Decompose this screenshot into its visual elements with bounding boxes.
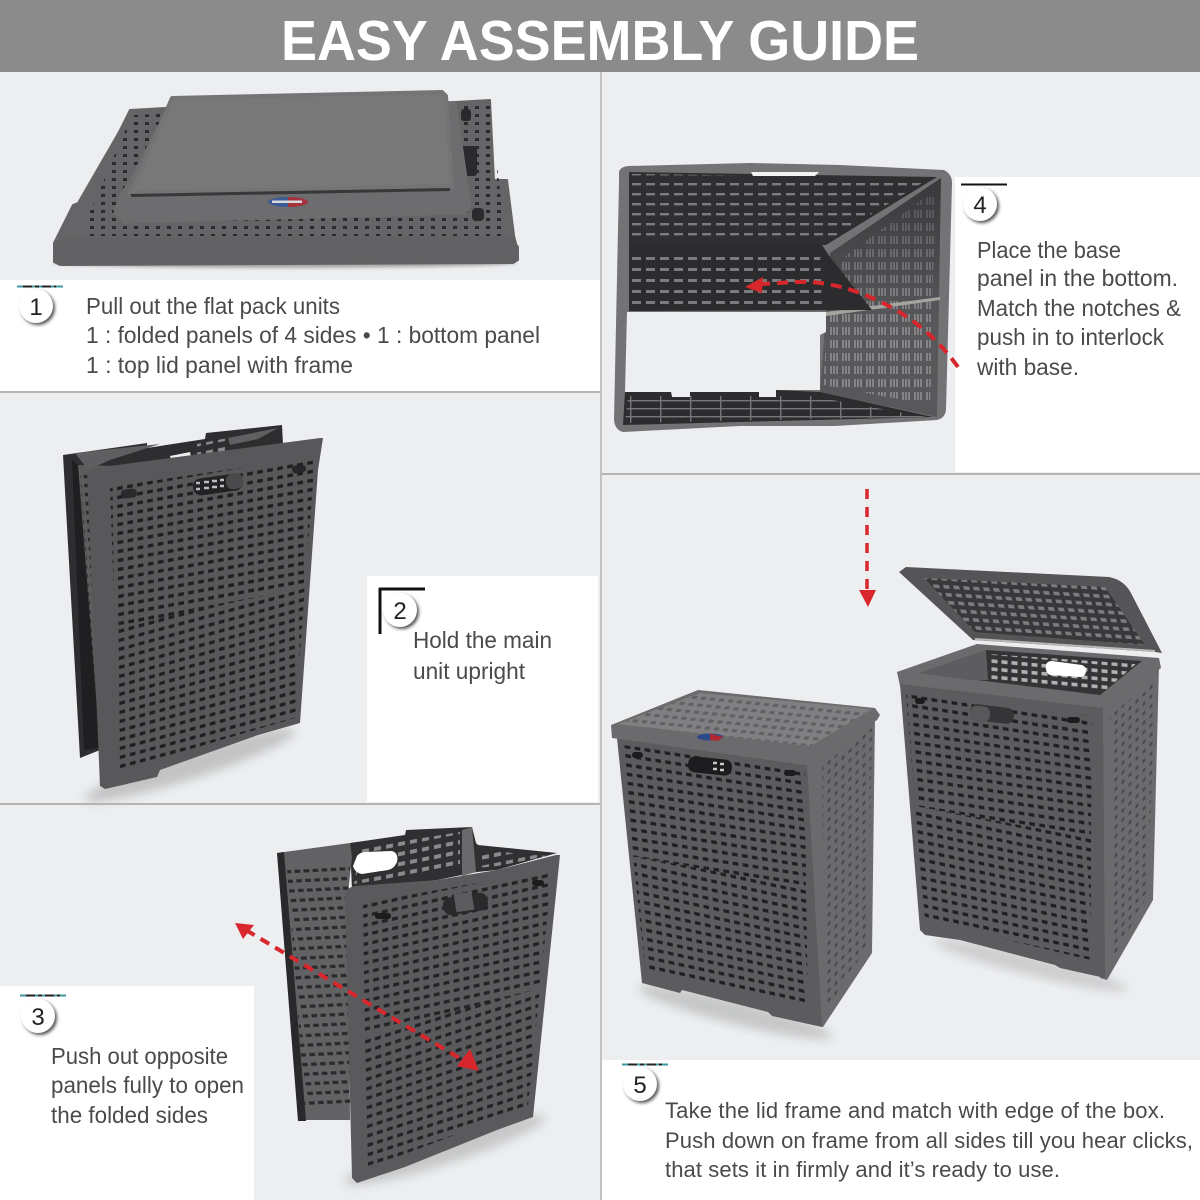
step number 4: 4 — [973, 192, 987, 219]
step number 2: 2 — [393, 598, 407, 625]
basket with open lid — [897, 567, 1162, 980]
text block: step 3 instructions: panels fully to open — [51, 1072, 244, 1098]
text block: step 2 instructions: unit upright — [413, 658, 526, 684]
text block: step 4 instructions: panel in the bottom. — [977, 265, 1178, 291]
title: EASY ASSEMBLY GUIDE — [281, 9, 919, 73]
arrow: base panel into box — [745, 277, 958, 367]
step number 5: 5 — [633, 1072, 647, 1099]
panel: step 4 — [600, 163, 1200, 475]
panel: step 2 — [0, 425, 600, 812]
text block: step 3 instructions: Push out opposite — [51, 1043, 228, 1069]
text block: step 5 instructions: Push down on frame from all sides till you hear clicks, — [665, 1128, 1193, 1153]
step number 1: 1 — [29, 294, 43, 321]
basket with closed lid — [611, 690, 880, 1027]
header banner — [0, 0, 1200, 73]
image: folded panels upright — [63, 425, 323, 812]
text block: step 1 instructions: Pull out the flat pack units — [86, 293, 340, 319]
image: opened folded sides — [277, 827, 560, 1196]
step number 3 — [20, 996, 66, 1035]
text block: step 3 instructions: the folded sides — [51, 1102, 208, 1128]
step number 5 — [622, 1064, 668, 1103]
text block: step 5 instructions: that sets it in firmly and it’s ready to use. — [665, 1157, 1060, 1182]
panel: step 5 — [600, 489, 1200, 1200]
text block: step 1 instructions: 1 : folded panels of 4 sides • 1 : bottom panel — [86, 322, 540, 348]
image: box with base opening — [614, 163, 952, 432]
text block: step 4 instructions: push in to interlock — [977, 324, 1164, 350]
arrow: push out both ways — [235, 923, 479, 1071]
step number 3: 3 — [31, 1004, 45, 1031]
panel: step 1 — [0, 92, 600, 393]
step number 4 — [961, 184, 1007, 223]
image: flat pack units — [53, 92, 518, 268]
text block: step 4 instructions: with base. — [976, 354, 1079, 380]
text block: step 3 instructions — [51, 1043, 244, 1128]
step number 2 — [379, 588, 425, 634]
text block: step 1 instructions — [86, 293, 540, 378]
text block: step 2 instructions: Hold the main — [413, 627, 552, 653]
panel: step 3 — [0, 827, 560, 1200]
text block: step 4 instructions: Place the base — [977, 237, 1121, 263]
arrow: lid down — [859, 489, 876, 607]
image: assembled baskets — [611, 567, 1162, 1048]
step number 1 — [17, 286, 63, 325]
text block: step 2 instructions — [413, 627, 552, 684]
text block: step 5 instructions: Take the lid frame and match with edge of the box. — [665, 1098, 1165, 1123]
text block: step 4 instructions: Match the notches & — [977, 295, 1181, 321]
text block: step 4 instructions — [976, 237, 1181, 380]
text block: step 1 instructions: 1 : top lid panel with frame — [86, 352, 353, 378]
text block: step 5 instructions — [665, 1098, 1193, 1182]
